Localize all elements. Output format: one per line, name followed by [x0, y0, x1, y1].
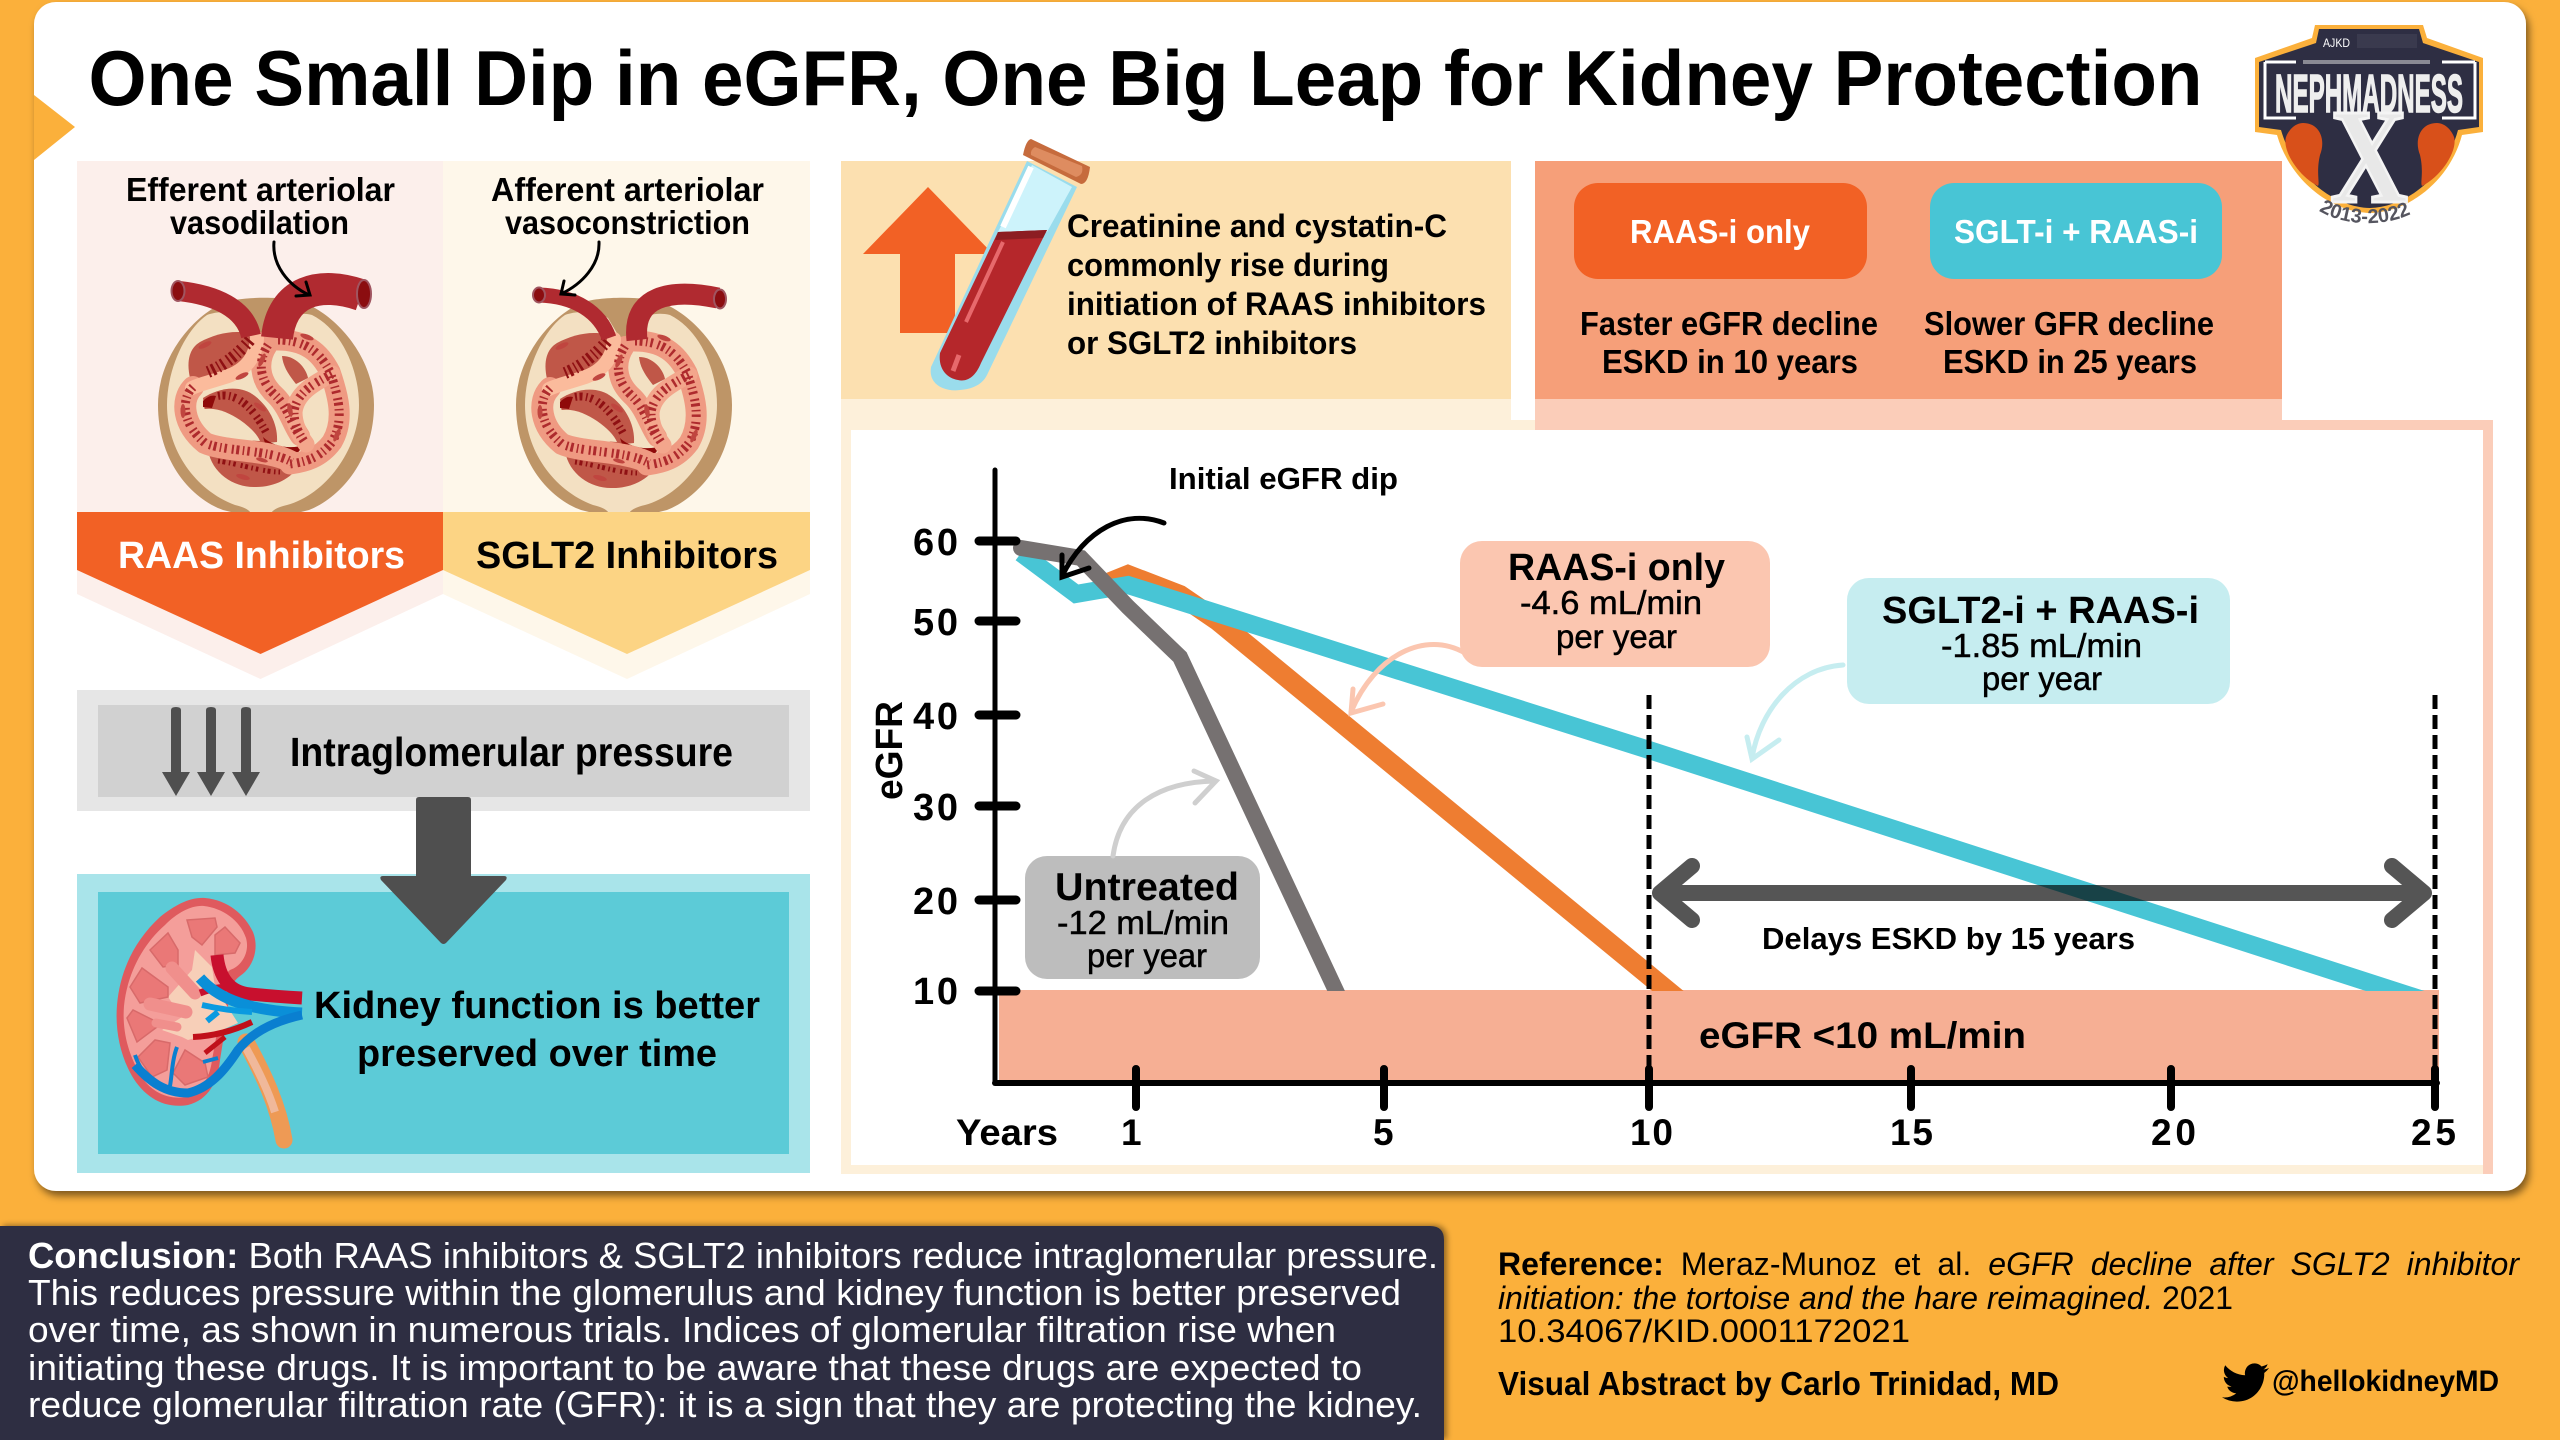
RAAS outcome text: ESKD in 10 years [1602, 343, 1858, 380]
kidney function label: Kidney function is better [314, 985, 760, 1027]
ESKD threshold label: eGFR <10 mL/min [1699, 1015, 2026, 1056]
chart frame [841, 399, 2493, 1174]
callout: RAAS-i only [1460, 541, 1770, 667]
button: SGLT-i + RAAS-i [1930, 183, 2222, 279]
callout: SGLT2-i + RAAS-i [1847, 578, 2230, 704]
button: RAAS-i only: RAAS-i only [1630, 213, 1811, 250]
Y axis labels: 30 [913, 787, 958, 829]
panel: RAAS inhibitors [77, 161, 443, 679]
reference text: initiation: the tortoise and the hare reimagined. 2021 [1498, 1280, 2233, 1316]
icon: test tube with blood [931, 139, 1090, 390]
arrow to efferent arteriole [274, 242, 310, 296]
icon: three down arrows [162, 707, 260, 796]
author credit: Visual Abstract by Carlo Trinidad, MD [1498, 1365, 2059, 1402]
title: One Small Dip in eGFR, One Big Leap for Kidney Protection [88, 34, 2202, 122]
RAAS outcome text [1580, 305, 1878, 380]
RAAS caption: Efferent arteriolar [126, 171, 395, 208]
kidney function label: preserved over time [357, 1033, 717, 1075]
arrow: initial dip [1062, 518, 1164, 577]
RAAS caption: vasodilation [170, 204, 349, 241]
conclusion text: initiating these drugs. It is important to be aware that these drugs are expected to [28, 1347, 1362, 1388]
line: untreated [1021, 548, 1345, 1010]
arrow to afferent arteriole [561, 242, 599, 295]
panel: SGLT2 inhibitors [443, 161, 810, 679]
logo: NephMadness X: AJKD [2323, 36, 2350, 50]
conclusion text: reduce glomerular filtration rate (GFR): it is a sign that they are protecting the kidney. [28, 1384, 1422, 1425]
icon: up arrow [863, 187, 993, 333]
logo: NephMadness X [2255, 25, 2483, 232]
dashed markers at 10 and 25 years [1649, 695, 2435, 1069]
X axis labels: 1 [1121, 1112, 1142, 1153]
X axis labels: 15 [1890, 1112, 1933, 1153]
chart: eGFR over time [869, 461, 2456, 1153]
callout: untreated [1025, 856, 1260, 979]
callout: untreated: -12 mL/min [1057, 904, 1229, 941]
creatinine text: Creatinine and cystatin-C [1067, 208, 1447, 244]
SGLT2 caption: Afferent arteriolar [491, 171, 764, 208]
callout: untreated: per year [1087, 937, 1207, 974]
panel: kidney function [77, 874, 810, 1173]
RAAS banner label: RAAS Inhibitors [118, 535, 405, 577]
SGLT2 caption [491, 171, 764, 241]
conclusion text: over time, as shown in numerous trials. Indices of glomerular filtration rise when [28, 1309, 1336, 1350]
glomerulus illustration: constricted afferent arteriole [516, 288, 732, 512]
RAAS caption [126, 171, 395, 241]
X axis labels: 25 [2411, 1112, 2456, 1153]
creatinine text: commonly rise during [1067, 247, 1389, 283]
icon: twitter bird [2222, 1363, 2269, 1402]
Y axis labels [913, 522, 958, 1013]
callout: SGLT2-i + RAAS-i: -1.85 mL/min [1941, 627, 2142, 664]
label: initial dip: Initial eGFR dip [1169, 461, 1398, 496]
Y axis labels: 20 [913, 881, 958, 923]
callout: SGLT2-i + RAAS-i: per year [1982, 660, 2102, 697]
callout: untreated: Untreated [1055, 866, 1239, 909]
Y axis labels: 10 [913, 971, 958, 1013]
arrow: RAAS callout to line [1351, 644, 1465, 713]
button: SGLT-i + RAAS-i: SGLT-i + RAAS-i [1954, 213, 2198, 250]
creatinine text [1067, 208, 1486, 361]
delay label: Delays ESKD by 15 years [1762, 921, 2135, 956]
X axis [995, 1069, 2437, 1107]
reference text: Reference: Meraz-Munoz et al. eGFR decline after SGLT2 inhibitor [1498, 1246, 2520, 1282]
Y axis labels: 50 [913, 602, 958, 644]
line: RAAS-i only [1103, 575, 1691, 1010]
callout: SGLT2-i + RAAS-i: SGLT2-i + RAAS-i [1882, 590, 2199, 632]
panel: conclusion [0, 1226, 1444, 1440]
arrow: untreated callout to line [1113, 771, 1216, 856]
arrow: SGLT2 callout to line [1747, 665, 1843, 759]
reference text: 10.34067/KID.0001172021 [1498, 1313, 1910, 1349]
creatinine text: initiation of RAAS inhibitors [1067, 286, 1486, 322]
callout: RAAS-i only: per year [1556, 618, 1677, 655]
pressure label: Intraglomerular pressure [290, 729, 733, 775]
X axis labels: 20 [2151, 1112, 2196, 1153]
callout: RAAS-i only: RAAS-i only [1508, 547, 1725, 589]
SGLT outcome text: Slower GFR decline [1924, 305, 2214, 342]
icon: kidney [117, 898, 302, 1140]
ESKD band [999, 990, 2439, 1083]
creatinine text: or SGLT2 inhibitors [1067, 325, 1357, 361]
SGLT outcome text: ESKD in 25 years [1943, 343, 2197, 380]
line: SGLT2-i + RAAS-i [1021, 553, 2454, 1010]
glomerulus illustration: dilated efferent arteriole [158, 280, 374, 512]
twitter handle: @hellokidneyMD [2272, 1365, 2499, 1398]
panel: treatment comparison [1535, 161, 2282, 399]
conclusion text [28, 1235, 1438, 1425]
callout: RAAS-i only: -4.6 mL/min [1520, 584, 1702, 621]
SGLT2 caption: vasoconstriction [505, 204, 750, 241]
Y axis title: eGFR [869, 701, 911, 800]
SGLT2 banner [443, 512, 810, 654]
conclusion text: This reduces pressure within the glomerulus and kidney function is better preserved [28, 1272, 1401, 1313]
panel: creatinine rise [841, 139, 1511, 420]
panel: intraglomerular pressure [77, 690, 810, 811]
arrow: pressure to kidney function [380, 797, 507, 944]
conclusion text: Conclusion: Both RAAS inhibitors & SGLT2 inhibitors reduce intraglomerular pressure. [28, 1235, 1438, 1276]
SGLT2 banner label: SGLT2 Inhibitors [476, 535, 778, 577]
X axis labels: 10 [1630, 1112, 1673, 1153]
double arrow: delay [1660, 866, 2424, 920]
kidney function label [314, 985, 760, 1075]
logo: NephMadness X: X [2330, 82, 2408, 232]
X axis labels: Years [956, 1112, 1058, 1153]
Y axis labels: 60 [913, 522, 958, 564]
logo: NephMadness X: 2013-2022 [2319, 200, 2410, 224]
SGLT outcome text [1924, 305, 2214, 380]
Y axis [979, 470, 1016, 1083]
X axis labels: 5 [1373, 1112, 1394, 1153]
RAAS outcome text: Faster eGFR decline [1580, 305, 1878, 342]
reference text [1498, 1246, 2520, 1349]
X axis labels [956, 1112, 2456, 1153]
button: RAAS-i only [1574, 183, 1867, 279]
Y axis labels: 40 [913, 696, 958, 738]
RAAS banner [77, 512, 443, 654]
